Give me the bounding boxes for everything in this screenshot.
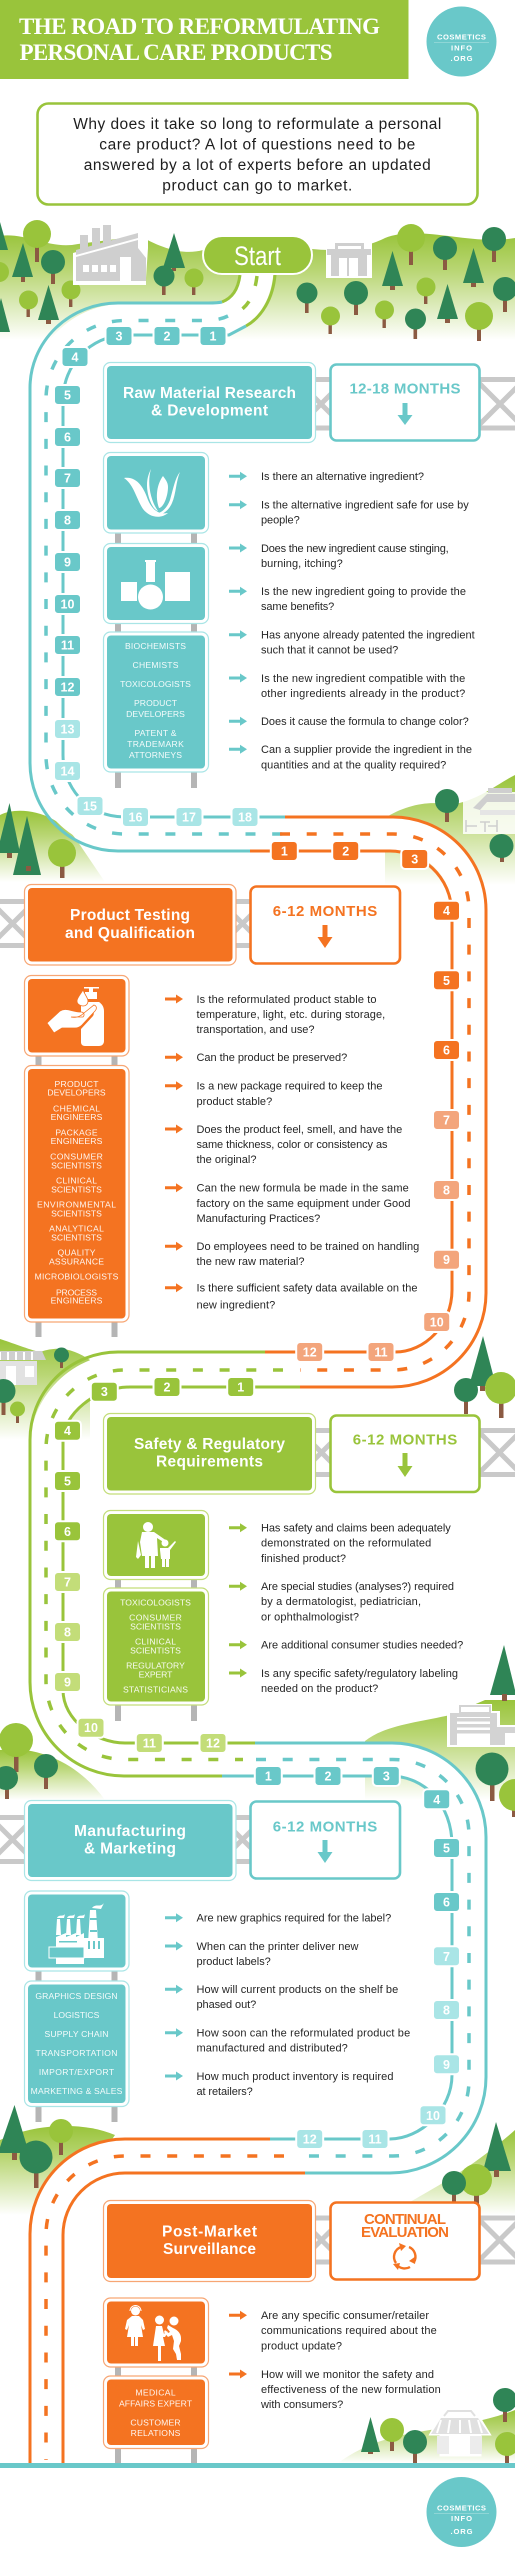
heading sign <box>104 362 316 442</box>
title <box>19 14 380 65</box>
sign: experts: CLINICAL <box>135 1637 176 1647</box>
road markers: raw material stage: 12 <box>61 680 74 694</box>
road markers: manufacturing stage: 5 <box>443 1842 450 1856</box>
road section 5 orange <box>30 2139 305 2463</box>
road markers: raw material stage: 3 <box>116 330 123 344</box>
road markers: safety stage: 12 <box>206 1736 220 1750</box>
duration box: CONTINUAL <box>364 2211 446 2228</box>
heading sign <box>104 2200 316 2282</box>
question 3 <box>165 1080 382 1108</box>
question 1: finished product? <box>261 1553 346 1565</box>
road markers: manufacturing stage: 1 <box>265 1770 272 1784</box>
trees: beside factory <box>154 233 204 295</box>
sign: experts: CLINICAL <box>56 1175 97 1185</box>
question 6: other ingredients already in the product? <box>261 688 465 700</box>
intro box <box>38 104 478 204</box>
sign: experts: ANALYTICAL <box>49 1224 104 1234</box>
question 3: Is a new package required to keep the <box>196 1080 382 1092</box>
panel: manufacturing and marketing <box>0 1800 410 2122</box>
sign: experts: CONSUMER <box>50 1151 103 1161</box>
question 6: Is the new ingredient compatible with the <box>261 673 465 685</box>
question 4: needed on the product? <box>261 1683 378 1695</box>
sign: experts <box>24 1981 129 2106</box>
road markers: product testing stage: 7 <box>443 1114 450 1128</box>
panel: product testing <box>0 884 419 1337</box>
icon: consumers and advisor <box>125 2306 181 2361</box>
heading sign: Surveillance <box>163 2241 256 2258</box>
icon: store <box>326 241 372 278</box>
question 1: temperature, light, etc. during storage, <box>196 1009 385 1021</box>
heading sign: Safety & Regulatory <box>134 1436 285 1453</box>
questions: raw material <box>229 471 475 771</box>
sign: experts: PRODUCT <box>134 698 178 708</box>
sign: lab glassware icon <box>104 544 208 624</box>
sign: people icon <box>104 2298 208 2367</box>
question 1: communications required about the <box>261 2325 437 2337</box>
heading sign <box>24 884 236 965</box>
road markers: raw material stage: 2 <box>164 330 171 344</box>
duration box <box>330 364 480 440</box>
sign: experts: MICROBIOLOGISTS <box>35 1272 119 1282</box>
sign: experts: ENGINEERS <box>51 1296 103 1306</box>
logo: cosmetics info bottom <box>426 2477 496 2547</box>
question 6 <box>165 1241 419 1268</box>
sign: experts <box>104 1588 208 1705</box>
road markers: product testing stage: 2 <box>342 844 349 858</box>
question 1: transportation, and use? <box>196 1024 314 1036</box>
road markers: raw material stage: 4 <box>72 350 79 364</box>
question 3: How will current products on the shelf be <box>196 1984 398 1996</box>
road markers: raw material stage <box>54 326 258 827</box>
questions: manufacturing <box>165 1912 410 2098</box>
road markers: manufacturing stage: 2 <box>325 1770 332 1784</box>
trees: section 3 to 4 <box>0 1723 515 1817</box>
sign: experts: PRODUCT <box>54 1079 99 1089</box>
sign: experts: ASSURANCE <box>49 1256 104 1266</box>
logo: cosmetics info bottom: .ORG <box>450 2527 473 2536</box>
road markers: manufacturing stage: 7 <box>443 1950 450 1964</box>
logo: cosmetics info top: COSMETICS <box>437 32 486 42</box>
road markers: safety stage: 11 <box>143 1736 156 1750</box>
icon: mother and child <box>136 1522 176 1568</box>
icon: factory with chimneys <box>49 1903 104 1964</box>
trees: section 2 to 3 right <box>454 1336 515 1418</box>
road markers: safety stage: 5 <box>64 1474 71 1488</box>
question 4: How soon can the reformulated product be <box>196 2028 410 2040</box>
duration box: 6-12 MONTHS <box>353 1432 457 1448</box>
question 8: Can a supplier provide the ingredient in the <box>261 744 472 756</box>
road markers: raw material stage: 1 <box>210 330 217 344</box>
road markers: manufacturing stage: 11 <box>368 2132 382 2146</box>
icon: aloe plant <box>124 469 180 517</box>
question 3 <box>165 1984 398 2011</box>
question 4: Is any specific safety/regulatory labeling <box>261 1668 458 1680</box>
sign: experts: ENGINEERS <box>51 1136 103 1146</box>
road markers: raw material stage: 8 <box>64 514 71 528</box>
heading sign: Post-Market <box>162 2224 257 2241</box>
question 4: same thickness, color or consistency as <box>196 1139 388 1151</box>
panel: raw material research <box>104 362 515 788</box>
road markers: product testing stage: 12 <box>303 1346 317 1360</box>
road markers: product testing stage: 11 <box>374 1346 388 1360</box>
question 5: at retailers? <box>196 2086 253 2098</box>
question 1 <box>229 1522 451 1565</box>
sign posts <box>115 1579 197 1721</box>
trees and market: section 1 to 2 right <box>435 788 515 862</box>
question 6: Do employees need to be trained on handling <box>196 1241 419 1253</box>
heading sign <box>24 1800 236 1880</box>
sign: aloe icon <box>104 452 208 533</box>
question 5: such that it cannot be used? <box>261 644 398 656</box>
sign: experts: DEVELOPERS <box>47 1088 106 1098</box>
questions: product testing <box>165 994 419 1312</box>
sign: experts: SCIENTISTS <box>130 1645 181 1655</box>
logo: cosmetics info bottom: INFO <box>451 2514 472 2523</box>
question 2 <box>165 1941 359 1968</box>
sign posts <box>115 533 197 788</box>
gantry truss <box>297 380 515 428</box>
start pill: Start <box>234 241 281 271</box>
duration box <box>250 1802 400 1878</box>
road markers: safety stage: 6 <box>64 1525 71 1539</box>
sign: experts: PROCESS <box>56 1287 97 1297</box>
hill: right of section 5 <box>405 2130 515 2215</box>
question 4: the original? <box>196 1154 256 1166</box>
question 2: by a dermatologist, pediatrician, <box>261 1596 421 1608</box>
sign: experts: REGULATORY <box>126 1661 185 1671</box>
heading sign: & Marketing <box>84 1840 176 1857</box>
question 8: quantities and at the quality required? <box>261 759 446 771</box>
road markers: raw material stage: 7 <box>64 472 71 486</box>
question 1: Are any specific consumer/retailer <box>261 2310 429 2322</box>
trees: section 1 to 2 left <box>0 803 76 878</box>
question 2: Can the product be preserved? <box>196 1052 347 1064</box>
question 2: Is the alternative ingredient safe for use by <box>261 500 469 512</box>
road section 2 orange <box>250 817 486 1387</box>
question 6: the new raw material? <box>196 1256 304 1268</box>
intro box: Why does it take so long to reformulate a personal <box>73 116 441 133</box>
question 3: burning, itching? <box>261 558 343 570</box>
road markers: manufacturing stage: 12 <box>303 2132 317 2146</box>
road markers: product testing stage: 6 <box>443 1044 450 1058</box>
panel: safety and regulatory <box>104 1414 515 1721</box>
question 3 <box>229 543 449 570</box>
header banner <box>0 0 408 79</box>
question 2 <box>229 500 469 526</box>
sign: experts: EXPERT <box>139 1669 173 1679</box>
sign: experts: CHEMISTS <box>132 660 179 670</box>
hill: left of section 2 <box>0 811 105 882</box>
question 1: demonstrated on the reformulated <box>261 1538 431 1550</box>
sign: experts: SCIENTISTS <box>51 1184 102 1194</box>
logo: cosmetics info top <box>426 6 496 76</box>
ground line <box>0 2463 515 2468</box>
intro box: answered by a lot of experts before an updated <box>84 157 431 174</box>
duration box: 6-12 MONTHS <box>273 903 377 920</box>
sign: experts: SCIENTISTS <box>51 1208 102 1218</box>
intro box: product can go to market. <box>162 178 352 195</box>
panel: post-market surveillance <box>104 2200 515 2463</box>
road section 4 teal <box>222 1743 486 2173</box>
sign: experts: MEDICAL <box>135 2387 176 2397</box>
sign: experts: IMPORT/EXPORT <box>39 2067 115 2077</box>
road markers: safety stage <box>54 1377 254 1753</box>
logo: cosmetics info top: INFO <box>451 44 472 52</box>
question 5: Manufacturing Practices? <box>196 1213 320 1225</box>
logo: cosmetics info top: .ORG <box>450 54 473 63</box>
road markers: manufacturing stage: 8 <box>443 2004 450 2018</box>
gantry truss <box>0 901 265 946</box>
road markers: raw material stage: 14 <box>61 764 74 778</box>
sign: experts: GRAPHICS DESIGN <box>35 1991 118 2001</box>
road markers: safety stage: 7 <box>64 1576 71 1590</box>
road markers: product testing stage: 1 <box>281 844 288 858</box>
heading sign: Product Testing <box>70 907 190 924</box>
duration box <box>330 1416 480 1492</box>
heading sign: Requirements <box>156 1453 263 1470</box>
road markers: raw material stage: 5 <box>64 388 71 402</box>
title: THE ROAD TO REFORMULATING <box>19 14 380 39</box>
road markers: safety stage: 2 <box>164 1380 171 1394</box>
logo: cosmetics info bottom: COSMETICS <box>437 2504 486 2512</box>
gantry truss <box>299 1430 515 1475</box>
sign: experts: TOXICOLOGISTS <box>120 679 191 689</box>
icon: recycle arrows <box>393 2243 416 2270</box>
road section 1 teal <box>30 275 285 851</box>
road markers: raw material stage: 10 <box>61 598 74 612</box>
sign: experts: MARKETING & SALES <box>31 2086 123 2096</box>
heading sign: Raw Material Research <box>123 385 296 402</box>
question 2: or ophthalmologist? <box>261 1612 359 1624</box>
question 5 <box>165 1182 410 1225</box>
icon: warehouse and pine <box>447 1645 515 1747</box>
sign: experts: CUSTOMER <box>130 2417 181 2427</box>
road markers: raw material stage: 13 <box>61 722 74 736</box>
question 3: Are additional consumer studies needed? <box>261 1640 463 1652</box>
road markers: raw material stage: 9 <box>64 556 71 570</box>
question 8 <box>229 744 472 771</box>
sign: experts: SUPPLY CHAIN <box>44 2029 108 2039</box>
road markers: product testing stage: 10 <box>430 1316 444 1330</box>
sign: experts: ENGINEERS <box>51 1112 103 1122</box>
question 2: with consumers? <box>260 2399 343 2411</box>
road section 3 green <box>30 1352 300 1776</box>
question 4 <box>165 2028 410 2054</box>
hills: top landscape <box>0 233 515 340</box>
road markers: safety stage: 8 <box>64 1626 71 1640</box>
question 2: people? <box>261 514 300 526</box>
question 1: Has safety and claims been adequately <box>261 1522 451 1534</box>
road markers: product testing stage <box>271 841 460 1362</box>
icon: hand with lotion <box>47 987 104 1046</box>
trees and market: bottom right <box>361 2388 515 2463</box>
sign: experts: TRANSPORTATION <box>36 2048 118 2058</box>
question 2: product labels? <box>196 1956 271 1968</box>
question 2 <box>229 1581 454 1624</box>
road markers: safety stage: 9 <box>64 1676 71 1690</box>
question 4: Is the new ingredient going to provide the <box>261 586 466 598</box>
road markers: raw material stage: 16 <box>129 810 142 824</box>
question 2: effectiveness of the new formulation <box>261 2384 441 2396</box>
hill: left of section 5 <box>0 2126 115 2215</box>
question 7: Is there sufficient safety data available on the <box>196 1282 418 1294</box>
duration box: 6-12 MONTHS <box>273 1818 377 1835</box>
sign: experts <box>104 632 208 772</box>
question 5 <box>229 630 475 656</box>
sign: factory icon <box>24 1891 129 1971</box>
intro box: care product? A lot of questions need to be <box>99 136 415 154</box>
hill: right of section 1 <box>385 775 515 885</box>
icon: factory <box>73 225 148 285</box>
sign: parent and child icon <box>104 1510 208 1580</box>
road markers: safety stage: 3 <box>101 1385 108 1399</box>
sign: experts: RELATIONS <box>131 2428 181 2438</box>
question 2: Are special studies (analyses?) required <box>261 1581 454 1593</box>
road markers: product testing stage: 5 <box>443 974 450 988</box>
road markers: raw material stage: 18 <box>238 810 252 824</box>
question 1: Are new graphics required for the label? <box>196 1912 391 1924</box>
sign: experts: BIOCHEMISTS <box>125 641 186 651</box>
road markers: raw material stage: 6 <box>64 430 71 444</box>
sign: experts: DEVELOPERS <box>126 709 185 719</box>
road markers: manufacturing stage: 3 <box>383 1770 390 1784</box>
question 1 <box>229 2310 437 2352</box>
sign: experts: CHEMICAL <box>53 1103 100 1113</box>
question 2 <box>229 2369 441 2411</box>
hill: bottom right <box>338 2410 515 2463</box>
question 7: Does it cause the formula to change color? <box>261 716 469 728</box>
road markers: manufacturing stage: 10 <box>426 2109 440 2123</box>
question 1: product update? <box>261 2340 342 2352</box>
sign: experts: ATTORNEYS <box>129 750 182 760</box>
hill: left of section 3 <box>0 1339 90 1440</box>
sign: experts <box>104 2376 208 2448</box>
question 4 <box>229 1668 458 1695</box>
sign: experts: ENVIRONMENTAL <box>37 1199 116 1209</box>
road markers: manufacturing stage: 6 <box>443 1896 450 1910</box>
question 5: Has anyone already patented the ingredient <box>261 630 475 642</box>
gantry truss <box>0 1817 265 1862</box>
question 3: phased out? <box>196 1999 256 2011</box>
road markers: product testing stage: 4 <box>443 904 450 918</box>
road markers: raw material stage: 17 <box>182 810 196 824</box>
question 7: new ingredient? <box>196 1300 275 1312</box>
question 4 <box>229 586 466 613</box>
trees: section 4 to 5 right <box>442 2122 511 2204</box>
road markers: product testing stage: 3 <box>411 852 418 866</box>
question 6 <box>229 673 465 700</box>
sign posts <box>36 1971 118 2122</box>
sign: experts: STATISTICIANS <box>123 1685 188 1695</box>
heading sign: and Qualification <box>65 925 195 942</box>
trees: top left <box>0 220 80 332</box>
heading sign: Manufacturing <box>74 1823 186 1840</box>
question 5: How much product inventory is required <box>196 2071 394 2083</box>
question 5: Can the new formula be made in the same <box>196 1182 409 1194</box>
sign posts <box>36 1056 118 1337</box>
question 3: product stable? <box>196 1096 272 1108</box>
question 2: How will we monitor the safety and <box>261 2369 434 2381</box>
heading sign: & Development <box>151 402 268 420</box>
question 5 <box>165 2071 394 2098</box>
road markers: raw material stage: 15 <box>83 800 97 814</box>
duration box <box>250 886 400 964</box>
road markers: raw material stage: 11 <box>61 638 74 652</box>
icon: flasks <box>121 560 190 610</box>
question 4: Does the product feel, smell, and have the <box>196 1124 402 1136</box>
trees and market: section 2 to 3 left <box>0 1348 69 1423</box>
question 4 <box>165 1124 402 1166</box>
road markers: manufacturing stage: 4 <box>433 1793 440 1807</box>
questions: post-market <box>229 2310 441 2411</box>
question 1: Is the reformulated product stable to <box>196 994 376 1006</box>
road markers: safety stage: 10 <box>84 1721 98 1735</box>
sign: experts: PATENT & <box>134 728 177 738</box>
question 3: Does the new ingredient cause stinging, <box>261 543 449 555</box>
gantry truss <box>299 2218 515 2262</box>
question 1: Is there an alternative ingredient? <box>261 471 424 483</box>
sign: experts: SCIENTISTS <box>51 1160 102 1170</box>
sign: experts: QUALITY <box>58 1248 96 1258</box>
title: PERSONAL CARE PRODUCTS <box>20 40 332 65</box>
questions: safety <box>229 1522 463 1695</box>
question 2: When can the printer deliver new <box>196 1941 359 1953</box>
sign: experts: SCIENTISTS <box>51 1232 102 1242</box>
road surface <box>46 272 469 2463</box>
heading sign <box>104 1414 316 1494</box>
sign: experts: CONSUMER <box>129 1613 182 1623</box>
trees: top right <box>296 224 515 341</box>
road markers: safety stage: 1 <box>237 1380 244 1394</box>
sign: experts: TOXICOLOGISTS <box>120 1597 191 1607</box>
hill: right of section 3 <box>365 1700 515 1800</box>
hill: left of section 4 <box>0 1749 105 1800</box>
question 4: manufactured and distributed? <box>196 2042 348 2054</box>
duration box <box>330 2202 480 2280</box>
sign: experts: SCIENTISTS <box>130 1621 181 1631</box>
sign: experts: AFFAIRS EXPERT <box>119 2398 193 2408</box>
sign: experts <box>24 1066 129 1322</box>
sign: hand and bottle icon <box>24 976 129 1056</box>
road markers: product testing stage: 8 <box>443 1184 450 1198</box>
question 5: factory on the same equipment under Good <box>196 1198 410 1210</box>
sign: experts: PACKAGE <box>55 1127 98 1137</box>
duration box: EVALUATION <box>361 2224 449 2241</box>
road markers: manufacturing stage: 9 <box>443 2058 450 2072</box>
start pill <box>203 236 312 274</box>
sign: experts: LOGISTICS <box>54 2010 100 2020</box>
question 7 <box>165 1282 418 1312</box>
question 4: same benefits? <box>261 601 334 613</box>
trees: section 4 to 5 left <box>0 2105 73 2188</box>
question 1 <box>165 994 385 1036</box>
sign: experts: TRADEMARK <box>127 739 184 749</box>
sign posts <box>115 2367 197 2463</box>
road markers: manufacturing stage <box>255 1766 460 2149</box>
duration box: 12-18 MONTHS <box>350 380 460 398</box>
road markers: safety stage: 4 <box>64 1424 71 1438</box>
road markers: product testing stage: 9 <box>443 1253 450 1267</box>
